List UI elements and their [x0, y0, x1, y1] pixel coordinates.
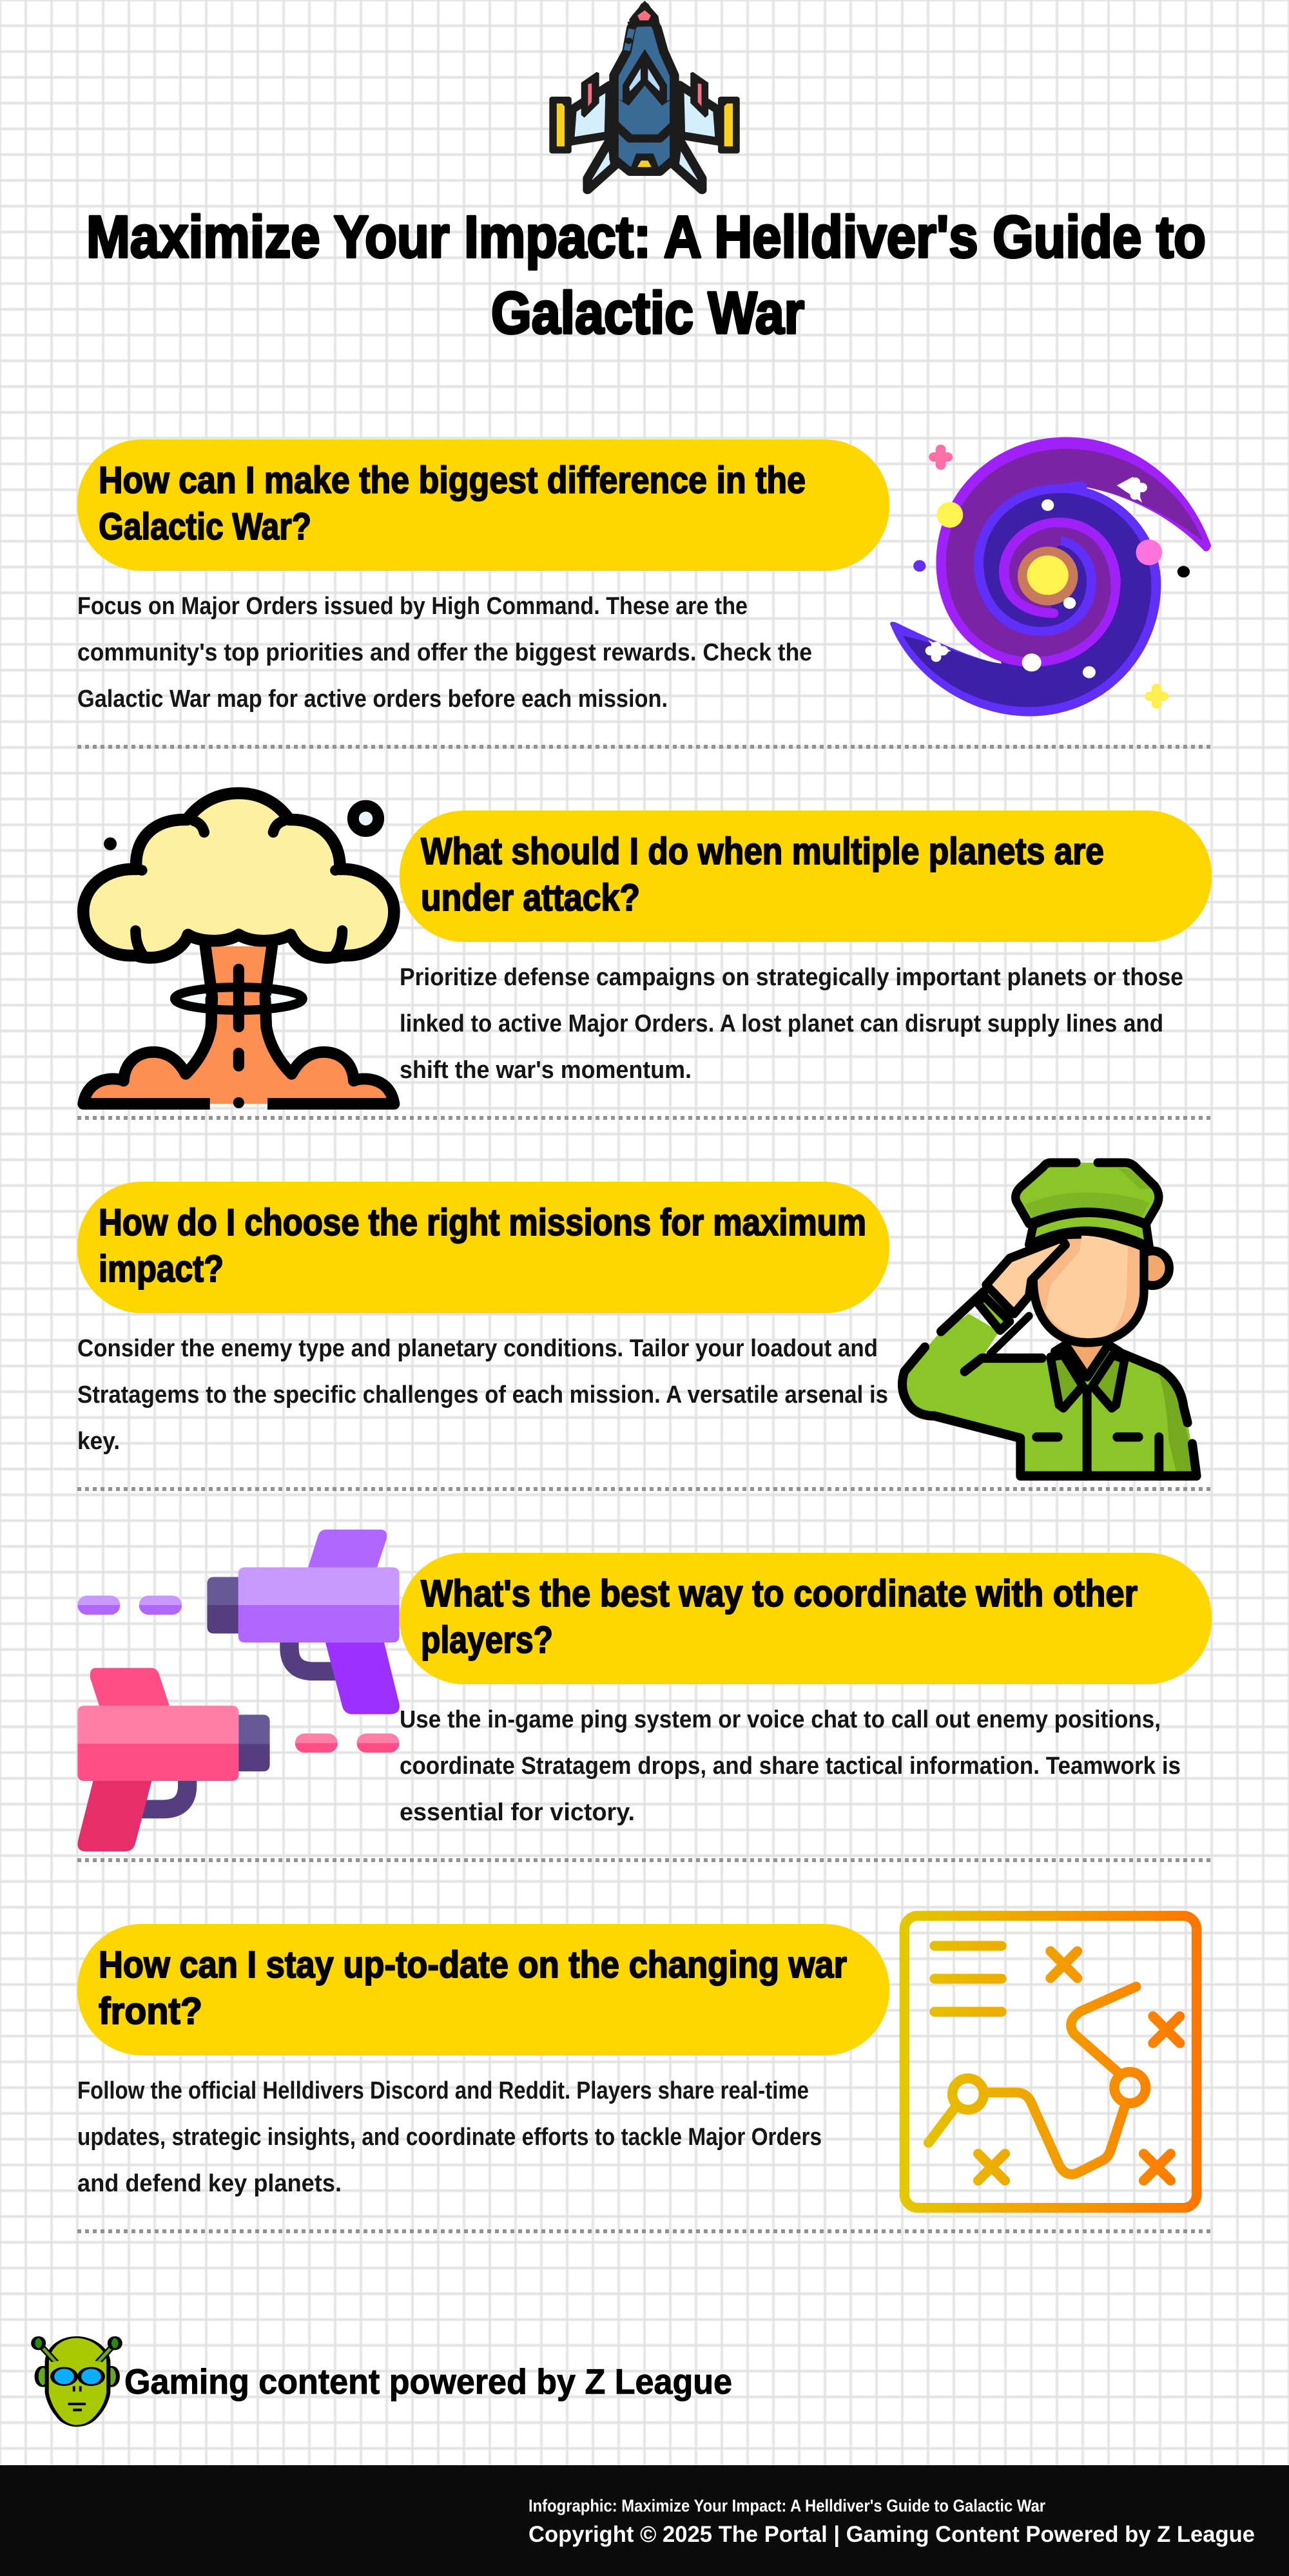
answer text 4: essential for victory.	[400, 1799, 635, 1826]
question heading 5: How can I stay up-to-date on the changing war	[99, 1944, 847, 1986]
answer text 5	[77, 2077, 822, 2197]
answer text 1: Focus on Major Orders issued by High Command. These are the	[77, 593, 748, 620]
answer text 2: linked to active Major Orders. A lost planet can disrupt supply lines and	[400, 1010, 1163, 1037]
question heading 3: How do I choose the right missions for maximum	[99, 1202, 866, 1244]
panel: question 4	[77, 1530, 1212, 1852]
panel: question 3	[77, 1162, 1197, 1476]
title	[86, 204, 1206, 346]
panel: question 5	[77, 1916, 1197, 2208]
heading pill 5	[77, 1924, 889, 2055]
footer bar	[0, 2465, 1289, 2576]
question heading 4	[421, 1573, 1138, 1661]
question heading 3	[99, 1202, 866, 1290]
icon: spaceship	[549, 1, 740, 190]
question heading 4: players?	[421, 1619, 553, 1661]
answer text 4: coordinate Stratagem drops, and share tactical information. Teamwork is	[400, 1753, 1181, 1780]
question heading 1: Galactic War?	[99, 506, 311, 548]
tagline: Gaming content powered by Z League	[124, 2361, 732, 2401]
icon: tactical map	[904, 1916, 1197, 2208]
question heading 4: What's the best way to coordinate with other	[421, 1573, 1138, 1615]
heading pill 1	[77, 439, 889, 571]
answer text 1	[77, 593, 812, 713]
answer text 2: shift the war's momentum.	[400, 1057, 692, 1084]
copyright line: Copyright © 2025 The Portal | Gaming Content Powered by Z League	[528, 2522, 1255, 2547]
answer text 2	[400, 964, 1183, 1084]
icon: alien head	[33, 2337, 121, 2426]
heading pill 3	[77, 1182, 889, 1313]
answer text 4	[400, 1706, 1181, 1826]
question heading 2: What should I do when multiple planets are	[421, 831, 1104, 872]
title: Galactic War	[491, 280, 804, 346]
question heading 2	[421, 831, 1104, 919]
answer text 5: updates, strategic insights, and coordinate efforts to tackle Major Orders	[77, 2124, 822, 2151]
heading pill 2	[400, 811, 1212, 942]
question heading 3: impact?	[99, 1248, 224, 1290]
panel: question 1	[77, 437, 1211, 716]
icon: two blaster guns	[77, 1530, 400, 1852]
question heading 1	[99, 459, 806, 548]
answer text 3: Consider the enemy type and planetary conditions. Tailor your loadout and	[77, 1335, 878, 1362]
answer text 1: community's top priorities and offer the biggest rewards. Check the	[77, 639, 812, 666]
answer text 2: Prioritize defense campaigns on strategically important planets or those	[400, 964, 1183, 991]
answer text 5: Follow the official Helldivers Discord and Reddit. Players share real-time	[77, 2077, 809, 2104]
question heading 5	[99, 1944, 847, 2032]
question heading 5: front?	[99, 1990, 202, 2032]
answer text 4: Use the in-game ping system or voice chat to call out enemy positions,	[400, 1706, 1161, 1733]
answer text 3	[77, 1335, 888, 1455]
pink blaster	[77, 1668, 400, 1852]
brand: alien logo and tagline	[33, 2337, 732, 2426]
answer text 3: key.	[77, 1428, 120, 1455]
heading pill 4	[400, 1553, 1212, 1684]
answer text 1: Galactic War map for active orders before each mission.	[77, 686, 668, 713]
panel: question 2	[83, 793, 1212, 1108]
icon: saluting soldier	[902, 1162, 1197, 1476]
footer caption: Infographic: Maximize Your Impact: A Helldiver's Guide to Galactic War	[528, 2496, 1045, 2515]
purple blaster	[77, 1530, 400, 1715]
answer text 3: Stratagems to the specific challenges of each mission. A versatile arsenal is	[77, 1381, 888, 1408]
icon: mushroom cloud	[83, 793, 394, 1108]
question heading 1: How can I make the biggest difference in the	[99, 459, 806, 501]
icon: spiral galaxy	[890, 437, 1211, 716]
answer text 5: and defend key planets.	[77, 2170, 342, 2197]
question heading 2: under attack?	[421, 877, 640, 919]
